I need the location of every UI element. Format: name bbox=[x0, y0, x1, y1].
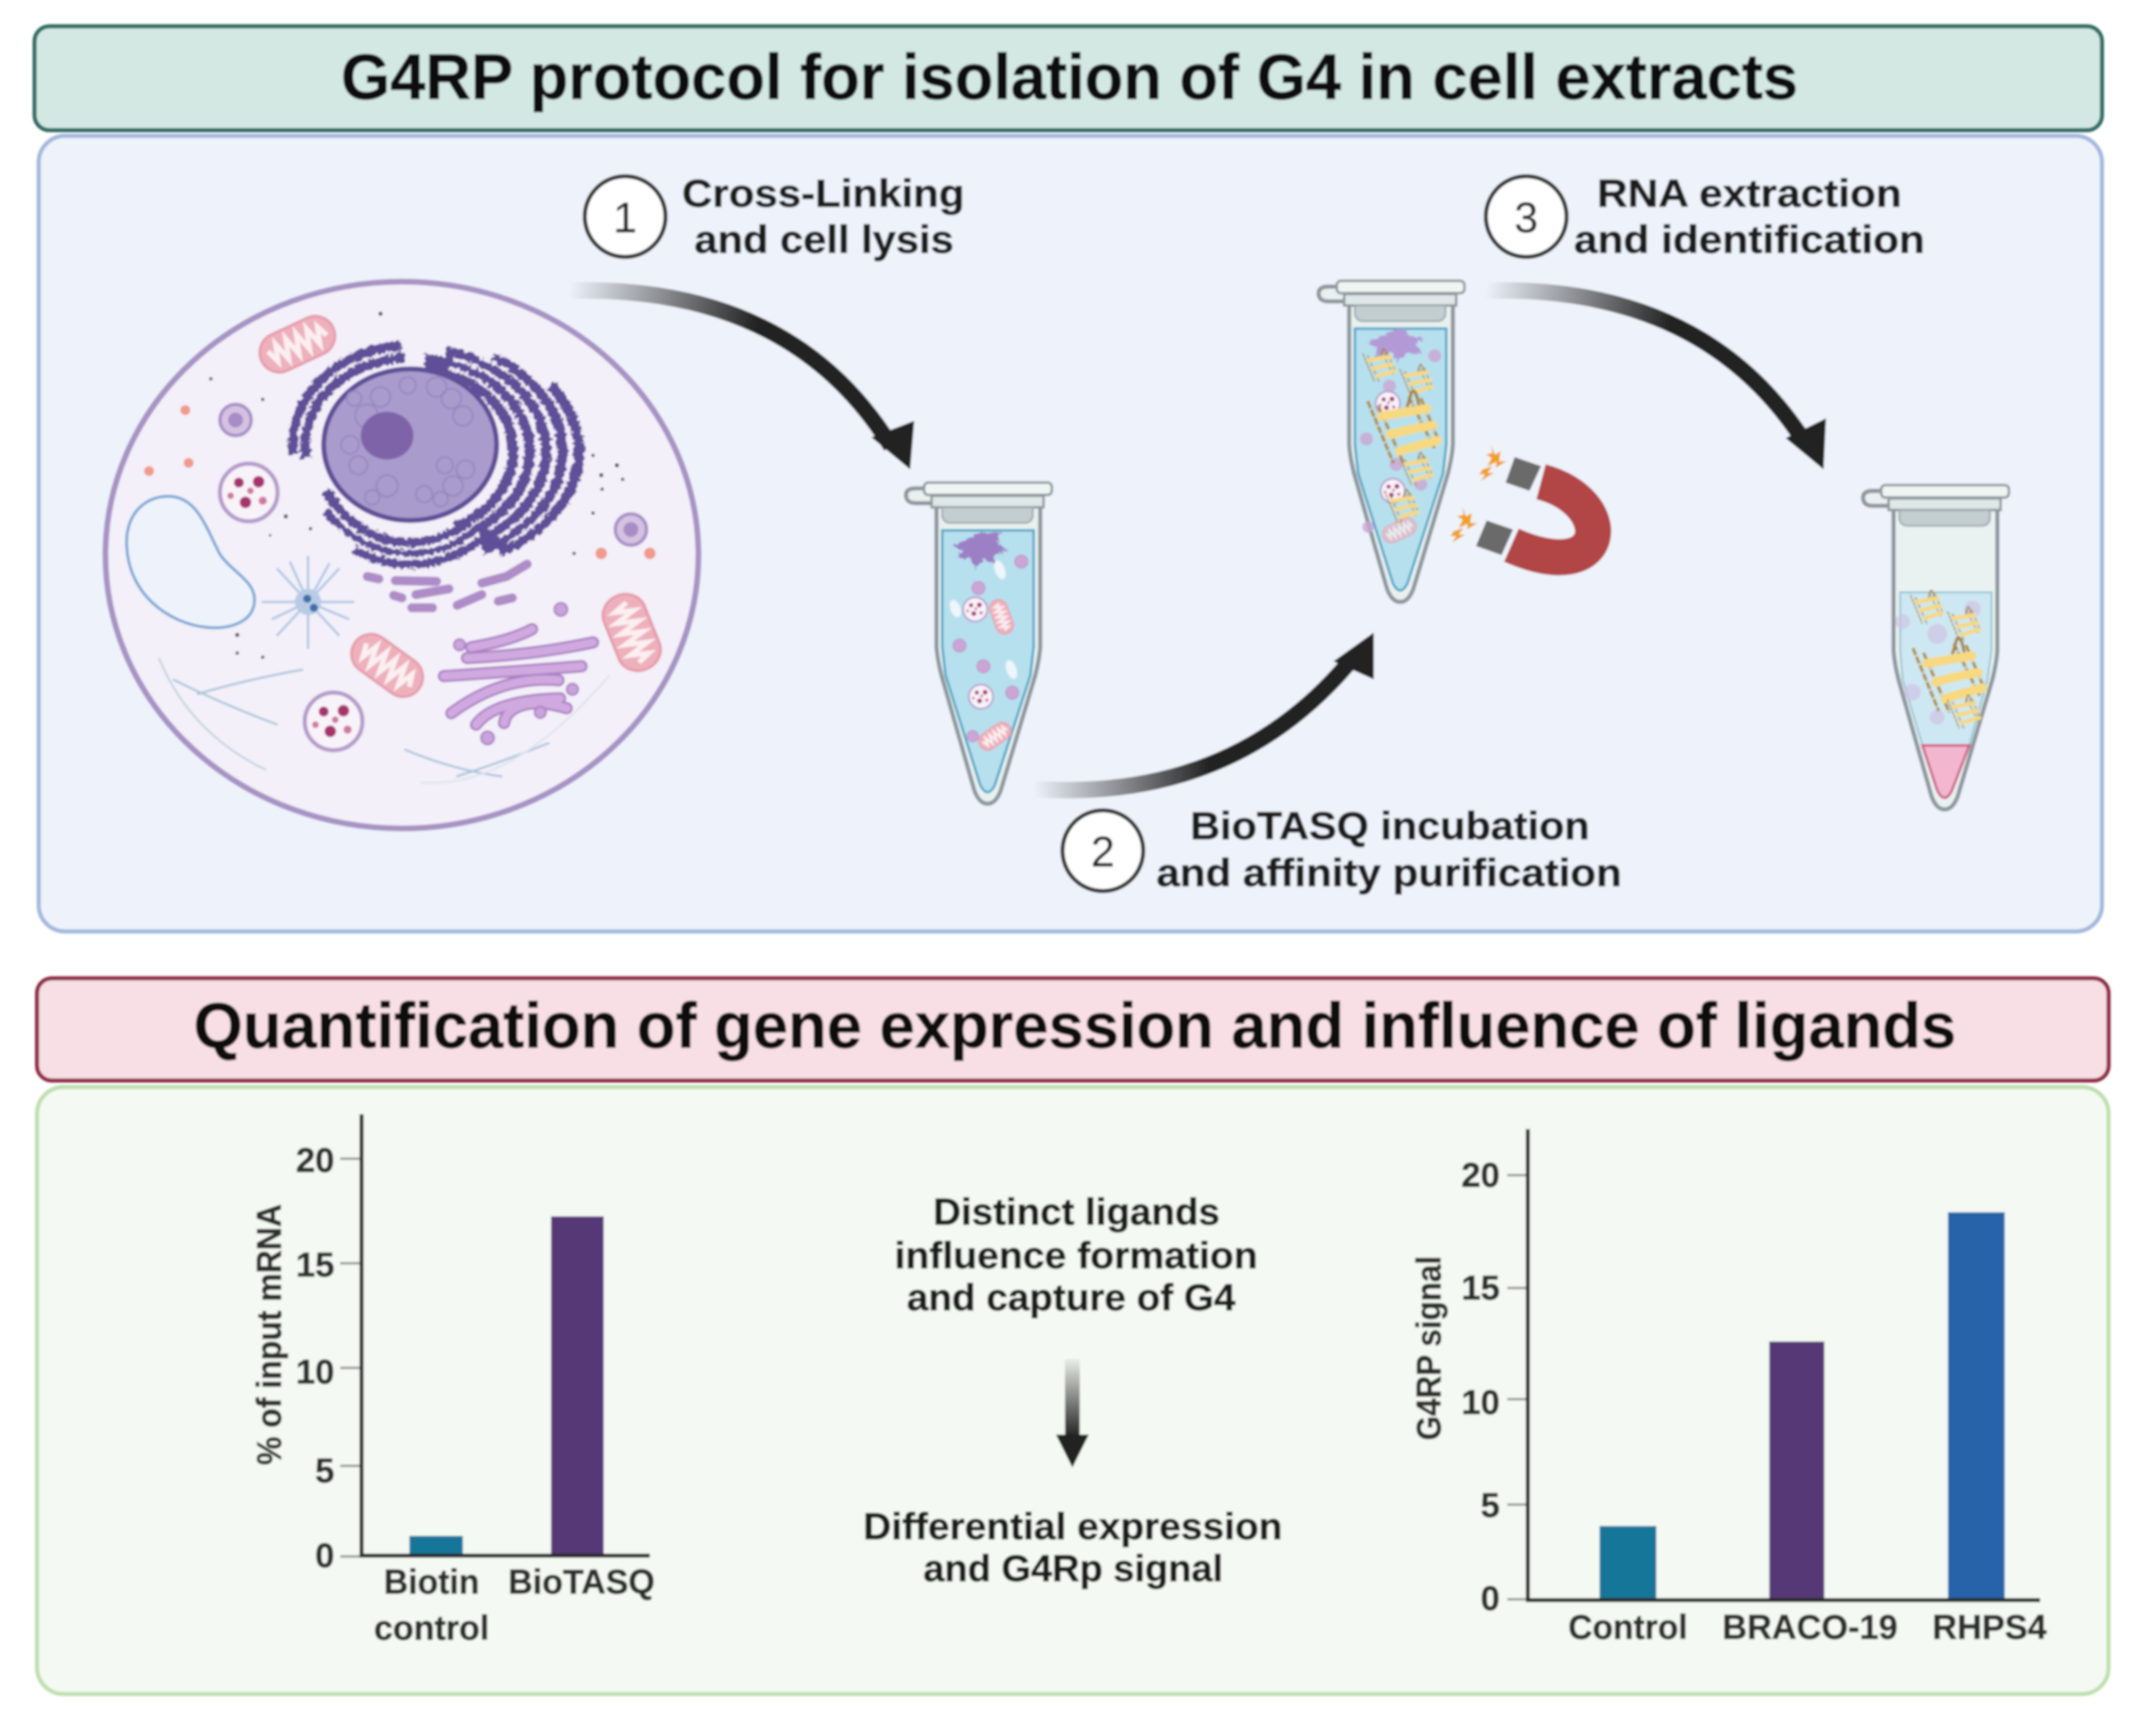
lysosome bbox=[615, 514, 647, 545]
header: quantification bbox=[37, 978, 2109, 1080]
x labels bbox=[374, 1562, 655, 1647]
y tick labels: 15 bbox=[1461, 1268, 1500, 1307]
axes bbox=[362, 1114, 650, 1556]
x labels: control bbox=[374, 1608, 489, 1647]
text: ligands influence: Distinct ligands bbox=[933, 1191, 1220, 1233]
golgi apparatus bbox=[444, 629, 593, 725]
tube 1: cell lysate bbox=[906, 483, 1052, 804]
mitochondrion bbox=[253, 310, 342, 379]
step 3 label: and identification bbox=[1574, 217, 1925, 261]
y ticks bbox=[1507, 1175, 1528, 1599]
step 2 label: and affinity purification bbox=[1156, 851, 1622, 894]
y tick labels: 20 bbox=[296, 1141, 334, 1179]
y tick labels bbox=[296, 1141, 334, 1575]
vacuole bbox=[127, 497, 255, 628]
lysosome bbox=[220, 404, 251, 436]
nucleolus bbox=[361, 412, 413, 460]
cytoskeleton bbox=[159, 658, 609, 783]
step 2 label: BioTASQ incubation bbox=[1190, 804, 1590, 847]
ribosomes bbox=[209, 311, 624, 659]
y tick labels: 20 bbox=[1461, 1155, 1500, 1194]
y tick labels: 5 bbox=[1481, 1486, 1500, 1524]
y axis label: % of input mRNA bbox=[250, 1204, 288, 1465]
header bar bbox=[37, 978, 2109, 1080]
header: G4RP protocol bbox=[35, 26, 2102, 130]
text: differential expression: Differential expression bbox=[863, 1505, 1282, 1547]
bar chart: G4RP signal bbox=[1409, 1129, 2048, 1646]
nucleus bbox=[324, 369, 497, 520]
axes bbox=[1528, 1129, 2040, 1600]
x labels bbox=[1568, 1608, 2048, 1646]
step 3 label: RNA extraction bbox=[1597, 171, 1902, 215]
smooth endoplasmic reticulum bbox=[367, 564, 527, 608]
panel: protocol steps bbox=[39, 136, 2102, 931]
cell membrane bbox=[105, 282, 698, 828]
tube 3: RNA extraction bbox=[1863, 485, 2009, 810]
peroxisome bbox=[220, 464, 278, 521]
step 3 label bbox=[1574, 171, 1925, 261]
bar: BioTASQ bbox=[551, 1216, 604, 1556]
step 1 label: and cell lysis bbox=[694, 217, 954, 261]
step 1 number: 1 bbox=[614, 194, 637, 242]
golgi vesicles bbox=[454, 603, 578, 744]
y tick labels: 0 bbox=[1481, 1579, 1500, 1617]
bar chart: percent of input mRNA bbox=[250, 1114, 655, 1647]
y tick labels: 15 bbox=[296, 1245, 334, 1284]
y tick labels: 0 bbox=[315, 1536, 334, 1575]
text: differential expression bbox=[863, 1505, 1282, 1589]
arrow 2 bbox=[1033, 632, 1374, 790]
step 1 label bbox=[682, 171, 964, 261]
mitochondrion bbox=[343, 626, 431, 705]
step 2 number: 2 bbox=[1091, 828, 1114, 876]
x labels: BRACO-19 bbox=[1722, 1608, 1898, 1646]
step 2 number bbox=[1062, 810, 1143, 891]
bar: Control bbox=[1600, 1526, 1656, 1600]
x labels: BioTASQ bbox=[508, 1562, 655, 1601]
step 2 label bbox=[1156, 804, 1622, 894]
x labels: Biotin bbox=[384, 1562, 479, 1601]
peroxisome bbox=[305, 693, 362, 750]
mitochondrion bbox=[597, 588, 666, 677]
y ticks bbox=[340, 1159, 362, 1556]
bar: Biotin control bbox=[409, 1536, 463, 1556]
panel background bbox=[39, 136, 2102, 931]
chromatin bbox=[341, 377, 474, 506]
y tick labels: 10 bbox=[296, 1352, 334, 1391]
title: Quantification of gene expression and influence of ligands bbox=[194, 989, 1956, 1062]
y tick labels: 10 bbox=[1461, 1383, 1500, 1421]
panel: quantification results bbox=[37, 1087, 2109, 1694]
y tick labels bbox=[1461, 1155, 1500, 1617]
arrow: down bbox=[1056, 1359, 1089, 1468]
title: G4RP protocol for isolation of G4 in cell extracts bbox=[341, 40, 1798, 113]
step 1 label: Cross-Linking bbox=[682, 171, 964, 215]
golgi cisternae bbox=[444, 629, 593, 725]
text: ligands influence: and capture of G4 bbox=[907, 1276, 1235, 1318]
y tick labels: 5 bbox=[315, 1451, 334, 1490]
rough endoplasmic reticulum bbox=[253, 334, 579, 568]
bar: RHPS4 bbox=[1948, 1212, 2005, 1600]
text: differential expression: and G4Rp signal bbox=[923, 1547, 1223, 1589]
arrow 3 bbox=[1485, 291, 1826, 469]
bar: BRACO-19 bbox=[1769, 1342, 1824, 1600]
panel background bbox=[37, 1087, 2109, 1694]
icon: animal cell bbox=[105, 282, 698, 828]
magnet bbox=[1450, 445, 1593, 558]
text: ligands influence: influence formation bbox=[894, 1234, 1258, 1276]
text: ligands influence bbox=[894, 1191, 1258, 1318]
arrow 1 bbox=[568, 291, 914, 469]
x labels: RHPS4 bbox=[1932, 1608, 2048, 1646]
tube 2: G4 capture bbox=[1319, 281, 1464, 602]
secretory dots bbox=[144, 405, 656, 559]
step 3 number bbox=[1486, 176, 1567, 257]
y axis label: G4RP signal bbox=[1409, 1256, 1448, 1440]
header bar bbox=[35, 26, 2102, 130]
x labels: Control bbox=[1568, 1608, 1688, 1646]
step 3 number: 3 bbox=[1515, 194, 1538, 242]
centrosome bbox=[262, 556, 354, 649]
step 1 number bbox=[585, 176, 666, 257]
